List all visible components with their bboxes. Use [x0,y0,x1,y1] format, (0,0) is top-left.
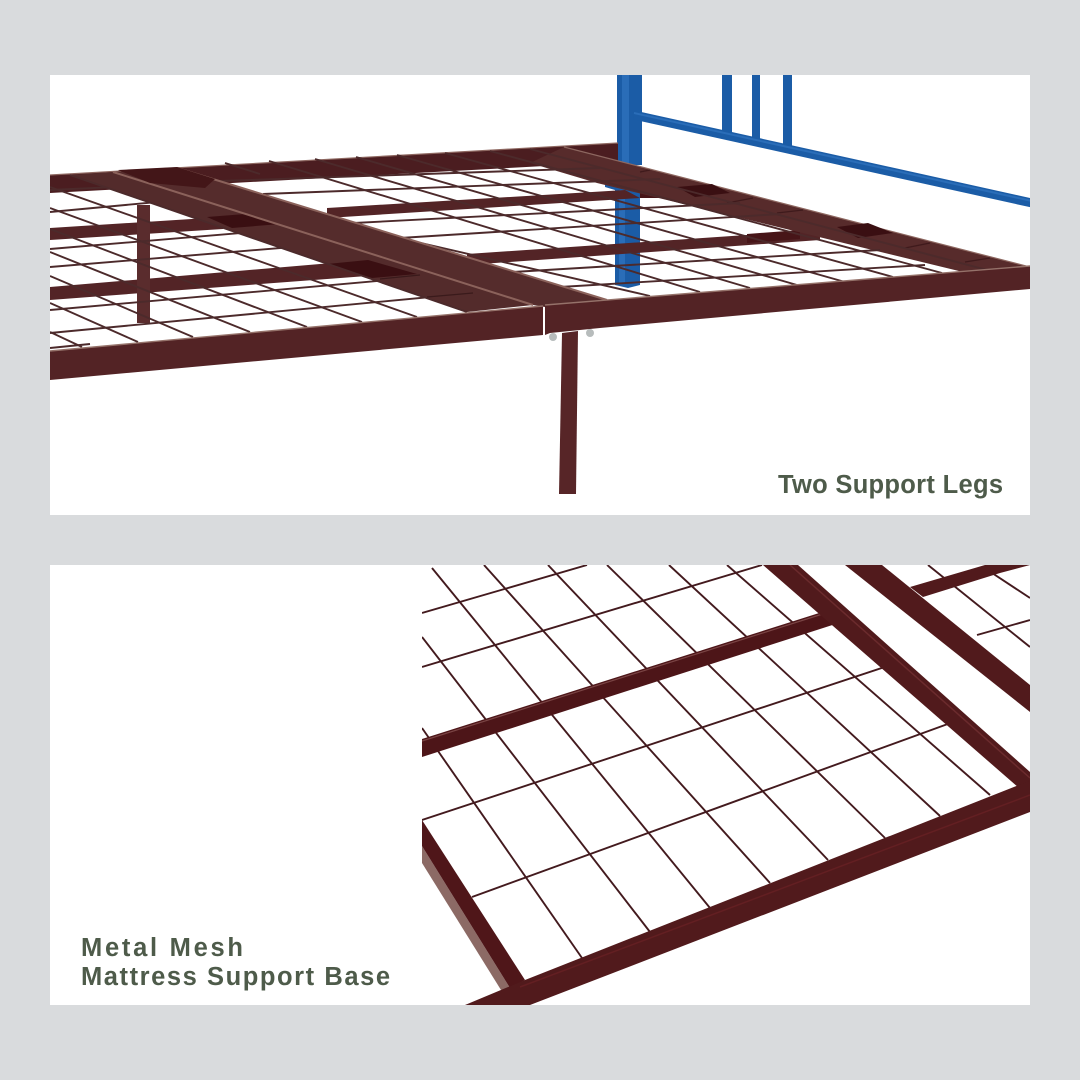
photo: mesh close-up [422,565,1030,1005]
panel: two support legs [50,75,1032,515]
caption: two support legs: Two Support Legs [778,471,1003,499]
panel: metal mesh base [50,565,1030,1005]
headboard: blue post and rails [605,75,1032,288]
back rail [50,143,618,193]
centre beam [113,168,607,307]
photo: bed frame with centre support leg [50,75,1032,494]
bolts [549,329,594,341]
side rail with flange [530,147,1030,272]
far cross bar [910,565,1030,597]
front rail [50,266,1030,380]
middle cross bar [422,608,848,757]
front rail [465,781,1030,1005]
centre support leg [559,331,578,494]
mesh wires: right half [220,149,987,296]
mesh wires [422,565,1030,958]
beam dark top block [118,167,215,188]
caption: metal mesh mattress support base [81,934,390,991]
cross bars [50,190,820,300]
caption: metal mesh mattress support base: Mattress Support Base [81,963,390,991]
caption: metal mesh mattress support base: Metal Mesh [81,934,243,962]
infographic canvas [50,75,1030,1005]
beam edge highlights [113,168,607,305]
second beam [845,565,1030,712]
left side rail [422,820,525,990]
rear support leg [137,205,150,323]
right side rail [763,565,1030,800]
mesh wires: left half [50,186,425,349]
centre beam flange [70,172,533,312]
